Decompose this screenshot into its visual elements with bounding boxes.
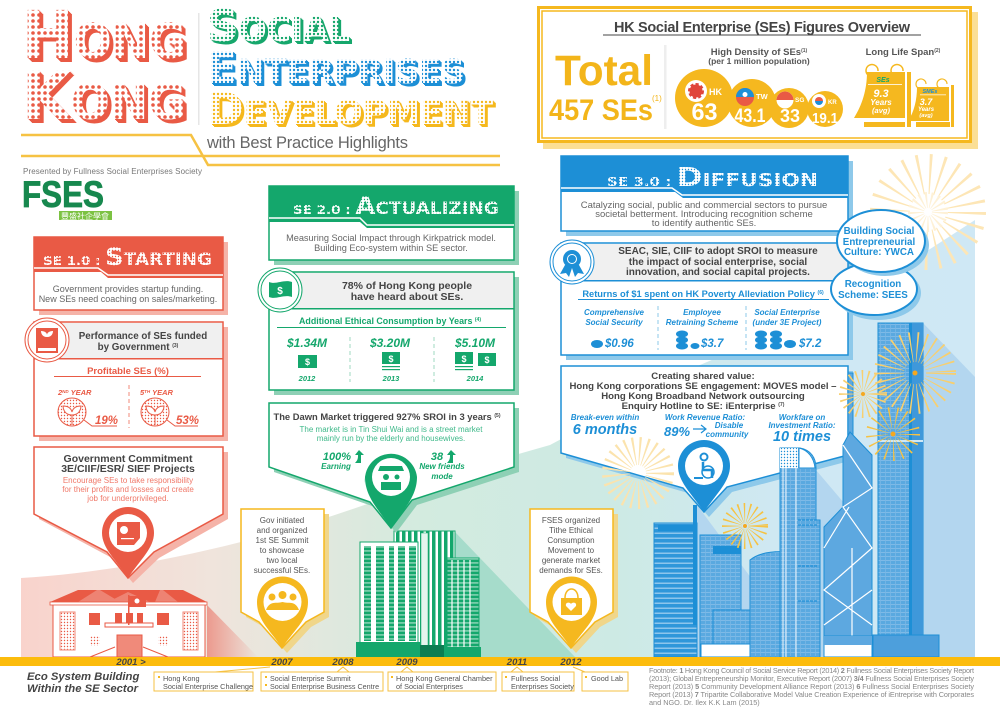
SEs calendar [854,65,911,127]
timeline label: Eco System Building: Within the SE Sector [27,683,139,695]
description: Measuring Social Impact through Kirkpatrick model. [286,233,496,243]
SG circle: 33 [780,106,800,126]
timeline box text: 2001 challenge [158,674,253,691]
timeline box text: 2009: Hong Kong General Chamber [396,674,493,683]
2014: $ [484,355,490,365]
workfare: Workfare on [779,413,825,422]
panel: Government Commitment [34,447,228,583]
heading: Government Commitment [64,453,193,465]
5th year [140,388,199,427]
SMEs calendar: (avg) [919,113,933,119]
subheading: Returns of $1 spent on HK Poverty Alleviation Policy [582,289,815,299]
TW circle: TW [756,92,769,101]
pin icon: shopping bag [546,576,597,648]
2nd year: 2 [58,388,62,397]
heading: the impact of social enterprise, social [629,257,807,268]
long life span calendars [854,47,954,127]
timeline box text: 2011 [505,674,574,691]
description: societal betterment. Introducing recognition scheme [595,209,813,220]
heading: Hong Kong corporations SE engagement: MOVES model – [569,381,837,392]
social enterprise 3E: Social Enterprise [754,308,820,317]
presenter and FSES logo [22,167,202,221]
5th year: 53% [176,415,199,427]
break-even: Break-even within [571,413,639,422]
timeline box text: 2001 challenge: Hong Kong [163,674,200,683]
callout bubble: SEES: Recognition [845,279,901,290]
workfare: 10 times [773,429,831,445]
heading [618,246,818,278]
KR circle: KR [828,100,837,106]
heading: Hong Kong Broadband Network outsourcing [601,391,805,402]
panel: 78% of Hong Kong people [258,268,519,395]
employee retraining scheme: Retraining Scheme [666,318,739,327]
green building [356,531,575,657]
earning stat: Earning [321,462,351,471]
SMEs calendar: SMEs [923,89,937,95]
heading: (7) [778,402,785,408]
heading: innovation, and social capital projects. [626,267,810,278]
HK circle: HK [709,87,722,97]
footnote: Footnote: 1 Hong Kong Council of Social Service Report (2014) 2 Fullness Social Enterprises Society Report [649,666,974,675]
2012: 2012 [298,374,316,383]
heading: (3) [172,343,179,349]
heading: SE 1.0 : STARTING [43,243,212,271]
title: Social Enterprises Development: ENTERPRISES [207,43,465,94]
timeline bar: 2001 > [115,657,146,668]
timeline bar [0,657,1000,668]
icon: money [258,268,302,312]
earning stat [321,450,364,471]
work revenue: community [706,430,749,439]
text: successful SEs. [254,566,310,575]
timeline box text: 2012: Good Lab [591,674,623,683]
heading: Enquiry Hotline to SE: iEnterprise [622,401,776,412]
text: Gov initiated [260,516,304,525]
comprehensive social security [584,308,645,350]
description [300,425,483,443]
subheading [277,316,506,328]
panel: 2007 Gov initiated pin [241,509,329,653]
total SEs [549,47,662,127]
heading: Creating shared value: [651,371,755,382]
pin icon: people [257,576,308,648]
heading: Performance of SEs funded [79,331,207,342]
heading: SE 2.0 : ACTUALIZING [293,192,499,220]
overview heading: HK Social Enterprise (SEs) Figures Overview [614,20,911,36]
description: mainly run by the elderly and housewives. [317,434,465,443]
panel: SEAC SIE CIIF SROI [550,240,853,360]
work revenue: Work Revenue Ratio: [665,413,745,422]
SMEs calendar [908,79,954,127]
high density of SEs [675,47,843,128]
SEs calendar: Years [870,98,892,107]
flag [128,595,146,625]
description: Catalyzing social, public and commercial sectors to pursue [581,200,827,211]
SG circle: SG [795,97,804,104]
earning stat: 100% [323,451,351,463]
friends stat [419,450,465,481]
building A [654,505,697,657]
description [581,200,827,229]
workfare [768,413,836,445]
heading: 3E/CIIF/ESR/ SIEF Projects [61,463,195,475]
2013: $3.20M [369,336,411,350]
SEs calendar: SEs [876,77,890,84]
employee retraining scheme: $3.7 [700,338,724,350]
timeline box text: 2007 and 2008 [265,674,379,691]
heading: SE 3.0 : DIFFUSION [607,163,818,193]
timeline box text: 2007 and 2008: Social Enterprise Summit [270,674,351,683]
2013: 2013 [382,374,400,383]
5th year: TH [144,389,151,394]
description [286,233,496,253]
social enterprise 3E: (under 3E Project) [753,318,822,327]
heading: 78% of Hong Kong people [342,280,472,292]
IFC tower [873,323,939,657]
SG circle [769,88,809,128]
pin icon: market stall [365,454,417,528]
subheading: Profitable SEs (%) [87,366,169,377]
description: to identify authentic SEs. [652,218,756,229]
timeline label: Eco System Building: Eco System Building [27,671,139,683]
timeline bar: 2009 [395,657,418,668]
timeline box text: 2001 challenge: Social Enterprise Challenge [163,682,253,691]
background: eco-system gradient hill [21,220,975,657]
timeline bar: 2008 [331,657,354,668]
comprehensive social security: $0.96 [604,338,634,350]
text: Consumption [547,536,595,545]
panel: SE 2.0 Actualizing [269,186,519,265]
workfare: Investment Ratio: [768,421,836,430]
work revenue [664,413,749,439]
callout bubble: YWCA [837,210,929,276]
subheading: (4) [475,317,481,323]
description [62,476,194,503]
footnote: Report (2013) 7 Tripartite Collaborative Model Value Creation Experience of iEntreprise with Corporates [649,690,974,699]
KR circle [807,91,843,127]
subtitle: with Best Practice Highlights [206,134,408,152]
SMEs calendar: Years [918,107,935,113]
footnote: (2013); Global Entrepreneurship Monitor, Executive Report (2007) 3/4 Fullness Social Enterprises Society [649,674,974,683]
heading [342,280,472,303]
friends stat: New friends [419,462,465,471]
work revenue: 89% [664,424,690,439]
2nd year: 19% [95,415,118,427]
timeline box text: 2011: Enterprises Society [511,682,574,691]
timeline bar: 2012 [559,657,582,668]
timeline boxes [154,667,628,691]
icon: book [25,318,69,362]
timeline box text: 2009: of Social Enterprises [396,682,463,691]
callout bubble: YWCA: Building Social [844,226,915,237]
SMEs calendar: 3.7 [920,97,933,107]
building B [700,535,753,657]
social enterprise 3E: $7.2 [798,338,822,350]
subheading: Additional Ethical Consumption by Years [299,316,472,326]
building C [750,552,788,657]
heading [79,331,207,353]
presenter and FSES logo: Presented by Fullness Social Enterprises Society [23,167,202,176]
friends stat: mode [431,472,453,481]
presenter and FSES logo: FSES [22,174,104,215]
subheading: (6) [818,290,824,296]
footnote [649,666,974,707]
text: Tithe Ethical [549,526,593,535]
callout bubble: SEES [831,263,921,320]
timeline bar: 2011 [506,657,527,668]
text: to showcase [260,546,305,555]
timeline box text: 2011: Fullness Social [511,674,560,683]
2012: $ [305,357,310,367]
HK circle: 63 [692,99,718,126]
pin icon: document [102,507,154,578]
SEs calendar: 9.3 [873,88,889,100]
timeline bar: 2007 [270,657,293,668]
timeline box text: 2007 and 2008: Social Enterprise Business Centre [270,682,379,691]
heading: The Dawn Market triggered 927% SROI in 3 years [273,411,492,422]
callout bubble: SEES: Scheme: SEES [838,290,908,301]
2012 [286,336,328,383]
high density of SEs: (per 1 million population) [708,56,810,66]
2013: $ [388,354,394,364]
pin icon: wheelchair headset [678,440,730,512]
description [39,284,217,304]
2014 [454,336,496,383]
presenter and FSES logo: 豐盛社企學會 [61,211,109,221]
text: generate market [542,556,601,565]
heading [61,453,195,475]
red government building [50,590,258,657]
high density of SEs: High Density of SEs [711,47,801,58]
total SEs: (1) [652,94,662,103]
text [254,516,310,575]
description: New SEs need coaching on sales/marketing. [39,294,217,304]
description: Government provides startup funding. [53,284,203,294]
comprehensive social security: Social Security [585,318,643,327]
text: FSES organized [542,516,600,525]
HK circle [675,69,733,127]
text: demands for SEs. [539,566,603,575]
friends stat: 38 [431,451,444,463]
2013 [369,336,411,383]
break-even: 6 months [573,422,637,438]
text: Movement to [548,546,595,555]
social enterprise 3E [753,308,822,350]
employee retraining scheme [666,308,739,350]
description: job for underprivileged. [86,494,169,503]
icon: money: $ [277,286,283,297]
high density of SEs: (1) [801,48,808,54]
long life span calendars: Long Life Span [866,47,934,58]
footnote: Report (2013) 5 Community Development Alliance Report (2013) 6 Fullness Social Enterprises Society [649,682,974,691]
TW circle [728,79,776,127]
2012: $1.34M [286,336,328,350]
fireworks: top right burst [890,174,966,250]
5th year: YEAR [150,388,174,397]
2nd year: YEAR [69,388,92,397]
panel: HK SE figures overview [537,6,978,149]
2nd year: ND [62,389,69,394]
title: Hong Kong [22,0,186,135]
description: Building Eco-system within SE sector. [314,243,468,253]
title: Social Enterprises Development: SOCIAL [207,1,350,52]
description: for their profits and losses and create [62,485,194,494]
timeline label: Eco System Building [27,671,139,695]
footnote: and NGO. Dr. Ilex K.K Lam (2015) [649,698,760,707]
text: 1st SE Summit [256,536,309,545]
panel: 2012 FSES organized pin [530,509,618,653]
text: and organized [257,526,307,535]
description: Encourage SEs to take responsibility [63,476,193,485]
5th year: 5 [140,388,144,397]
KR circle: 19.1 [812,110,838,127]
description: The market is in Tin Shui Wai and is a street market [300,425,483,434]
fireworks: around the skyline [616,347,941,539]
title: Hong Kong: KONG [22,58,186,135]
callout bubble: YWCA: Culture: YWCA [844,247,914,258]
total SEs: Total [555,47,653,95]
icon: award rosette [550,240,594,284]
heading: by Government [98,342,170,353]
callout bubble: YWCA: Entrepreneurial [843,237,915,248]
bank tower overlapping the panel [824,373,872,657]
text: two local [266,556,298,565]
title: Social Enterprises Development [207,1,493,135]
panel: SE 1.0 Starting [34,237,228,315]
panel: SE 3.0 Diffusion [561,156,853,236]
panel: The Dawn Market [269,403,519,533]
2014: $5.10M [454,336,496,350]
2nd year [57,388,118,427]
heading: have heard about SEs. [351,291,463,303]
title: Social Enterprises Development: DEVELOPMENT [207,84,493,135]
heading [569,371,837,412]
blue skyline [654,323,975,657]
break-even [571,413,639,438]
comprehensive social security: Comprehensive [584,308,645,317]
work revenue: Disable [715,421,744,430]
heading: (5) [494,413,501,419]
total SEs: 457 SEs [549,94,653,127]
long life span calendars: (2) [934,48,941,54]
panel: Performance of SEs funded by Government [25,318,228,441]
timeline box text: 2009 [391,674,493,691]
heading: SEAC, SIE, CIIF to adopt SROI to measure [618,246,818,257]
2014: 2014 [466,374,484,383]
TW circle: 43.1 [734,106,766,127]
2014: $ [461,354,467,364]
central tower overlapping the panel [780,448,820,657]
panel: Creating shared value [561,366,853,517]
SEs calendar: (avg) [872,106,890,115]
text [539,516,603,575]
employee retraining scheme: Employee [683,308,721,317]
